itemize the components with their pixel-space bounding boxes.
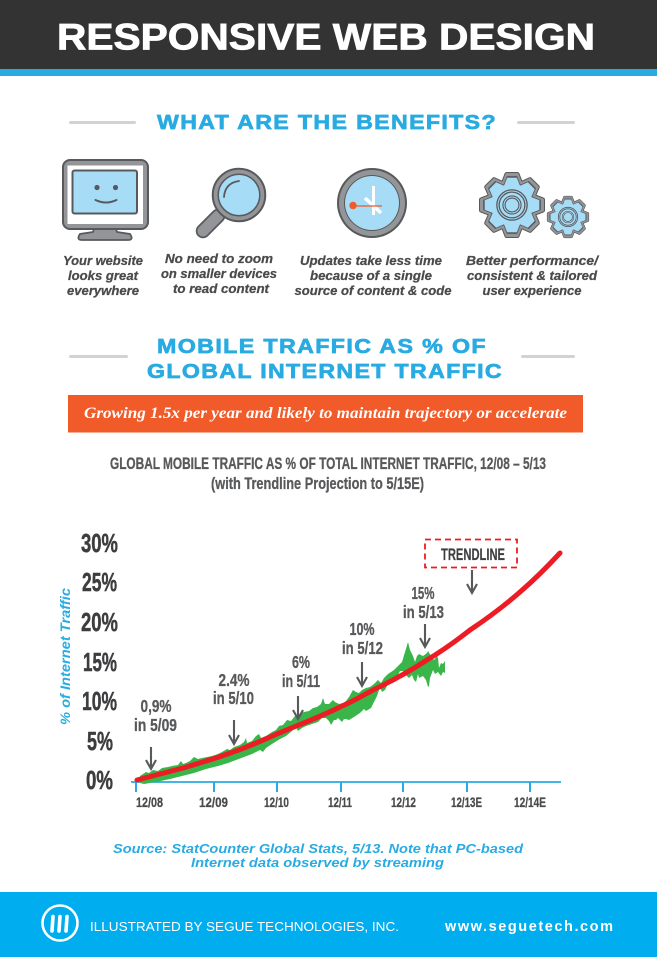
x axis: 12/09 xyxy=(199,794,228,810)
y axis labels: 15% xyxy=(83,647,117,677)
icon: segue logo xyxy=(42,906,78,940)
red trendline xyxy=(137,553,560,780)
heading: mobile traffic: MOBILE TRAFFIC AS % OF xyxy=(157,335,487,358)
panel: benefit monitor xyxy=(63,160,148,298)
annotation: 6% in 5/11: in 5/11 xyxy=(282,671,320,691)
annotation: 15% in 5/13: in 5/13 xyxy=(403,602,444,622)
source note: Internet data observed by streaming xyxy=(191,855,444,870)
y axis labels: 25% xyxy=(82,567,117,597)
callout: trendline label: TRENDLINE xyxy=(441,545,505,564)
callout: growth banner: Growing 1.5x per year and likely to maintain trajectory or accelerate xyxy=(84,405,567,422)
caption: Better performance/ xyxy=(466,254,600,268)
annotation: 15% in 5/13: 15% xyxy=(412,583,435,603)
icon: smiling monitor xyxy=(63,160,148,240)
source note: Source: StatCounter Global Stats, 5/13. Note that PC-based xyxy=(113,841,524,856)
annotation: 0.9% in 5/09 xyxy=(134,696,177,769)
caption: because of a single xyxy=(310,269,432,283)
source note xyxy=(113,841,524,870)
x axis xyxy=(131,782,561,810)
annotation: 6% in 5/11 xyxy=(282,652,320,719)
y axis labels: 0% xyxy=(86,765,113,795)
line chart: mobile traffic share xyxy=(58,528,561,810)
annotation: 10% in 5/12: 10% xyxy=(350,619,375,639)
caption: everywhere xyxy=(67,284,139,298)
annotation: 2.4% in 5/10: in 5/10 xyxy=(213,688,254,708)
caption: Your website xyxy=(63,254,143,268)
y axis labels: 30% xyxy=(81,528,118,558)
chart title xyxy=(110,454,546,493)
header banner xyxy=(0,0,657,76)
heading: what are the benefits: WHAT ARE THE BENEFITS? xyxy=(157,111,497,134)
callout: growth banner xyxy=(68,395,583,432)
green actual data series xyxy=(140,642,445,784)
caption: consistent & tailored xyxy=(467,269,597,283)
footer xyxy=(0,892,657,957)
title: RESPONSIVE WEB DESIGN xyxy=(57,16,595,58)
chart title: (with Trendline Projection to 5/15E) xyxy=(211,474,424,493)
y axis title: % of Internet Traffic xyxy=(58,587,73,725)
website: www.seguetech.com xyxy=(444,919,613,935)
annotation: 2.4% in 5/10 xyxy=(213,670,254,744)
caption: source of content & code xyxy=(294,284,452,298)
caption: on smaller devices xyxy=(161,267,277,281)
caption: to read content xyxy=(173,282,270,296)
caption: No need to zoom xyxy=(165,252,273,266)
icon: gears xyxy=(481,174,588,237)
annotation: 10% in 5/12 xyxy=(342,619,383,686)
caption: user experience xyxy=(482,284,582,298)
x axis: 12/13E xyxy=(451,794,482,810)
icon: magnifying glass xyxy=(203,169,265,231)
x axis: 12/08 xyxy=(136,794,163,810)
annotation: 0.9% in 5/09: in 5/09 xyxy=(134,715,177,735)
x axis: 12/11 xyxy=(328,794,352,810)
heading: what are the benefits xyxy=(69,111,575,134)
annotation: 10% in 5/12: in 5/12 xyxy=(342,638,383,658)
annotation: 0.9% in 5/09: 0,9% xyxy=(140,696,172,716)
callout: trendline label xyxy=(425,540,517,593)
annotation: 2.4% in 5/10: 2.4% xyxy=(218,670,250,690)
x axis: 12/14E xyxy=(514,794,546,810)
icon: clock xyxy=(337,168,407,238)
y axis labels: 5% xyxy=(87,726,113,756)
x axis: 12/10 xyxy=(264,794,289,810)
y axis labels xyxy=(81,528,118,795)
caption: looks great xyxy=(68,269,139,283)
annotation: 6% in 5/11: 6% xyxy=(292,652,310,672)
credit: ILLUSTRATED BY SEGUE TECHNOLOGIES, INC. xyxy=(90,920,399,934)
y axis labels: 20% xyxy=(81,607,118,637)
panel: benefit clock xyxy=(294,168,452,298)
heading: mobile traffic xyxy=(69,335,575,383)
annotation: 15% in 5/13 xyxy=(403,583,444,647)
panel: benefit gears xyxy=(466,174,600,298)
panel: benefit magnifier xyxy=(161,169,277,296)
heading: mobile traffic: GLOBAL INTERNET TRAFFIC xyxy=(147,360,503,383)
y axis labels: 10% xyxy=(82,686,117,716)
caption: Updates take less time xyxy=(300,254,442,268)
x axis: 12/12 xyxy=(391,794,416,810)
